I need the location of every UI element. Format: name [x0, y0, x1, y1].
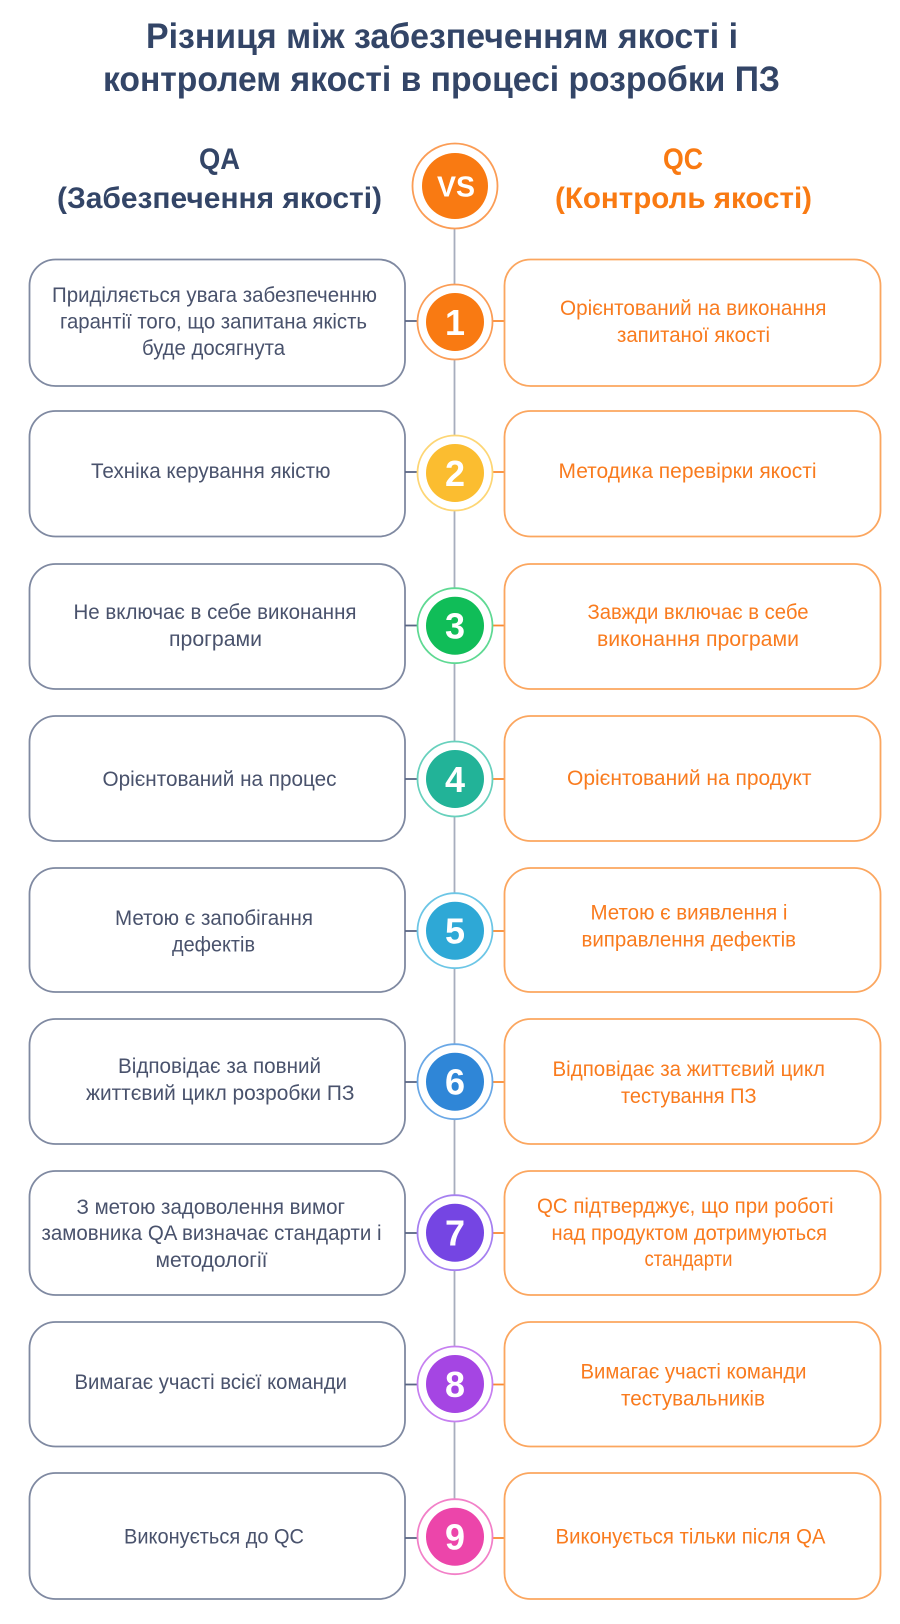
row 3: [30, 564, 880, 689]
badge 1: 1: [445, 302, 465, 343]
QA card 9: Виконується до QC: [124, 1524, 304, 1548]
QA card 7: замовника QA визначає стандарти і: [42, 1221, 382, 1245]
row 4: [30, 716, 880, 841]
QA card 7: З метою задоволення вимог: [76, 1195, 345, 1219]
heading: QA: (Забезпечення якості): [57, 182, 382, 215]
QC card 3: [504, 564, 880, 689]
QC card 1: [504, 260, 880, 386]
badge 2: 2: [445, 453, 465, 494]
QC card 7: [504, 1171, 880, 1295]
QC card 8: тестувальників: [621, 1386, 765, 1410]
QC card 4: [504, 716, 880, 841]
QA card 3: [30, 564, 405, 689]
QA card 6: [30, 1019, 405, 1144]
row 5: [30, 868, 880, 992]
QC card 8: [504, 1322, 880, 1446]
row 9: [30, 1473, 880, 1599]
heading: QC: QC: [663, 143, 703, 176]
QA card 1: гарантії того, що запитана якість: [60, 310, 367, 334]
QA card 4: Орієнтований на процес: [102, 767, 337, 791]
timeline line: [454, 228, 456, 1500]
badge 3: [405, 588, 504, 663]
title: контролем якості в процесі розробки ПЗ: [103, 60, 780, 99]
badge 7: [405, 1195, 504, 1270]
heading: QC: [555, 143, 812, 215]
QC card 7: QC підтверджує, що при роботі: [537, 1194, 834, 1218]
badge 6: [405, 1044, 504, 1119]
QA card 1: [30, 260, 405, 386]
title: [103, 17, 780, 99]
badge 5: [405, 893, 504, 968]
heading: QA: [57, 143, 382, 215]
QA card 9: [30, 1473, 405, 1599]
QC card 4: Орієнтований на продукт: [567, 766, 812, 790]
title: Різниця між забезпеченням якості і: [146, 17, 738, 56]
badge 4: 4: [445, 759, 465, 800]
badge 1: [405, 284, 504, 360]
heading: QA: QA: [199, 143, 240, 176]
QA card 7: методології: [156, 1248, 268, 1272]
QA card 4: [30, 716, 405, 841]
badge 2: [405, 436, 504, 510]
badge 9: [405, 1499, 504, 1574]
row 2: [30, 411, 880, 536]
QA card 7: [30, 1171, 405, 1295]
QC card 2: Методика перевірки якості: [558, 459, 816, 483]
QC card 6: Відповідає за життєвий цикл: [552, 1057, 825, 1081]
QC card 6: тестування ПЗ: [621, 1084, 756, 1108]
QA card 3: Не включає в себе виконання: [74, 600, 356, 624]
QC card 1: запитаної якості: [617, 323, 770, 347]
row 1: [30, 260, 880, 386]
QC card 7: над продуктом дотримуються: [552, 1221, 827, 1245]
QA card 5: Метою є запобігання: [115, 906, 313, 930]
QA card 1: буде досягнута: [142, 336, 285, 360]
badge 8: 8: [445, 1364, 465, 1405]
QA card 1: Приділяється увага забезпеченню: [52, 283, 377, 307]
badge 5: 5: [445, 911, 465, 952]
badge 8: [405, 1346, 504, 1422]
QC card 5: Метою є виявлення і: [590, 900, 788, 924]
QC card 1: Орієнтований на виконання: [560, 296, 826, 320]
heading: QC: (Контроль якості): [555, 182, 812, 215]
QC card 2: [504, 411, 880, 536]
row 7: [30, 1171, 880, 1295]
badge 9: 9: [445, 1517, 465, 1558]
QC card 3: виконання програми: [597, 627, 799, 651]
QA card 2: Техніка керування якістю: [91, 459, 330, 483]
badge 7: 7: [445, 1213, 465, 1254]
QC card 9: Виконується тільки після QA: [556, 1524, 826, 1548]
QC card 9: [504, 1473, 880, 1599]
badge: VS: [412, 144, 498, 228]
row 6: [30, 1019, 880, 1144]
badge: VS: VS: [437, 172, 475, 204]
QA card 6: Відповідає за повний: [118, 1054, 321, 1078]
QC card 8: Вимагає участі команди: [580, 1360, 806, 1384]
row 8: [30, 1322, 880, 1446]
QA card 8: [30, 1322, 405, 1446]
QC card 7: стандарти: [644, 1247, 732, 1271]
QA card 2: [30, 411, 405, 536]
QA card 5: дефектів: [172, 932, 255, 956]
QA card 3: програми: [169, 627, 262, 651]
QC card 6: [504, 1019, 880, 1144]
QA card 8: Вимагає участі всієї команди: [74, 1370, 347, 1394]
QC card 5: виправлення дефектів: [582, 928, 796, 952]
badge 3: 3: [445, 606, 465, 647]
QA card 6: життєвий цикл розробки ПЗ: [86, 1081, 354, 1105]
QC card 5: [504, 868, 880, 992]
badge 4: [405, 742, 504, 816]
QA card 5: [30, 868, 405, 992]
badge 6: 6: [445, 1062, 465, 1103]
QC card 3: Завжди включає в себе: [588, 600, 808, 624]
